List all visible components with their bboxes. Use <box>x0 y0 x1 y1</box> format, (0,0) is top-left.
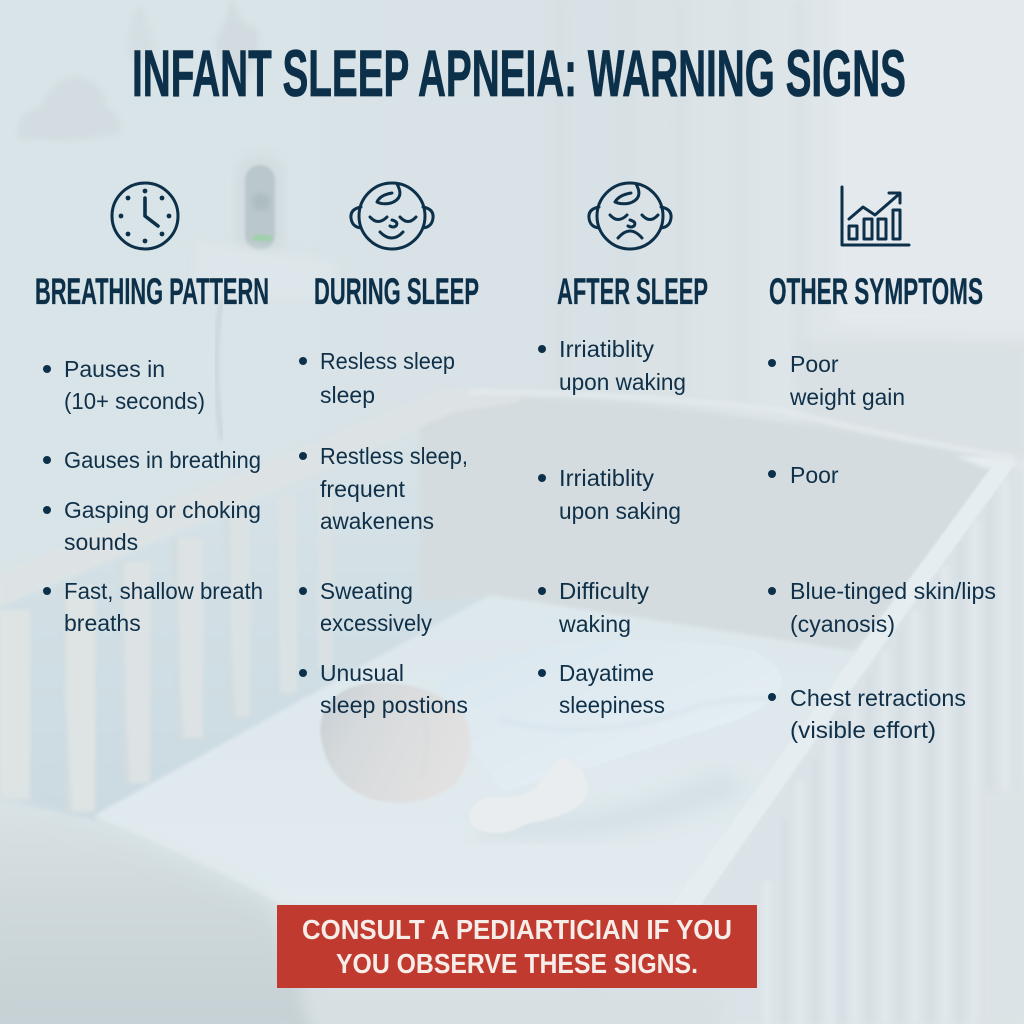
list: other symptoms <box>768 351 996 743</box>
list: other symptoms: Chest retractions <box>790 685 966 711</box>
list: during sleep signs: awakenens <box>320 508 434 534</box>
list: during sleep signs: frequent <box>320 476 406 502</box>
column: breathing pattern <box>35 271 269 636</box>
front rail left <box>0 795 320 1024</box>
column: after sleep <box>538 271 708 718</box>
list: other symptoms: (visible effort) <box>790 717 936 743</box>
list: after sleep signs: Irriatiblity <box>559 465 655 491</box>
icon: rising chart <box>842 187 909 245</box>
list: during sleep signs: Sweating <box>320 578 413 604</box>
icon: sleeping baby face <box>351 183 433 249</box>
list: breathing pattern signs: Gauses in breathing <box>64 447 261 473</box>
callout: consult a pediatrician: CONSULT A PEDIARTICIAN IF YOU <box>302 914 732 945</box>
list: other symptoms: Blue-tinged skin/lips <box>790 578 996 604</box>
icon: clock <box>112 183 178 249</box>
left slats <box>0 480 333 812</box>
list: other symptoms: Poor <box>790 351 839 377</box>
list: after sleep signs: waking <box>558 611 631 637</box>
lower-left crib interior <box>0 420 520 820</box>
list: breathing pattern signs: sounds <box>64 529 138 555</box>
list: during sleep signs: sleep <box>320 382 375 408</box>
heading: breathing pattern: BREATHING PATTERN <box>35 271 269 312</box>
back panel <box>420 395 1005 655</box>
list: other symptoms: Poor <box>790 462 839 488</box>
crib rail left <box>0 389 520 606</box>
list: during sleep signs <box>299 348 468 718</box>
list: breathing pattern signs: breaths <box>64 610 141 636</box>
list: after sleep signs: sleepiness <box>559 692 665 718</box>
list: breathing pattern signs: Fast, shallow breath <box>64 578 263 604</box>
heading: during sleep: DURING SLEEP <box>314 271 479 312</box>
list: after sleep signs: Difficulty <box>559 578 650 604</box>
list: after sleep signs: Dayatime <box>559 660 654 686</box>
list: during sleep signs: Resless sleep <box>320 348 455 374</box>
mattress <box>93 595 860 905</box>
list: during sleep signs: Restless sleep, <box>320 443 468 469</box>
list: breathing pattern signs <box>43 356 263 636</box>
list: after sleep signs <box>538 336 686 718</box>
list: during sleep signs: Unusual <box>320 660 404 686</box>
icon: unhappy baby face <box>589 183 671 249</box>
list: after sleep signs: upon saking <box>559 498 681 524</box>
list: other symptoms: weight gain <box>789 384 905 410</box>
list: breathing pattern signs: Gasping or choking <box>64 497 261 523</box>
list: breathing pattern signs: (10+ seconds) <box>64 388 205 414</box>
heading: after sleep: AFTER SLEEP <box>557 271 708 312</box>
column: during sleep <box>299 271 479 718</box>
list: after sleep signs: upon waking <box>559 369 686 395</box>
callout: consult a pediatrician: YOU OBSERVE THESE SIGNS. <box>336 948 698 979</box>
list: breathing pattern signs: Pauses in <box>64 356 165 382</box>
list: after sleep signs: Irriatiblity <box>559 336 655 362</box>
right rail <box>672 462 1012 905</box>
baby <box>320 640 782 838</box>
mobile clouds <box>17 0 259 140</box>
column: other symptoms <box>768 271 996 743</box>
baby monitor <box>236 156 284 256</box>
callout: consult a pediatrician <box>277 905 757 988</box>
back rail highlight <box>470 392 1015 458</box>
right slats area <box>640 462 1024 1024</box>
list: during sleep signs: sleep postions <box>320 692 468 718</box>
floor bottom right <box>980 790 1024 1024</box>
list: other symptoms: (cyanosis) <box>790 611 895 637</box>
list: during sleep signs: excessively <box>320 610 432 636</box>
